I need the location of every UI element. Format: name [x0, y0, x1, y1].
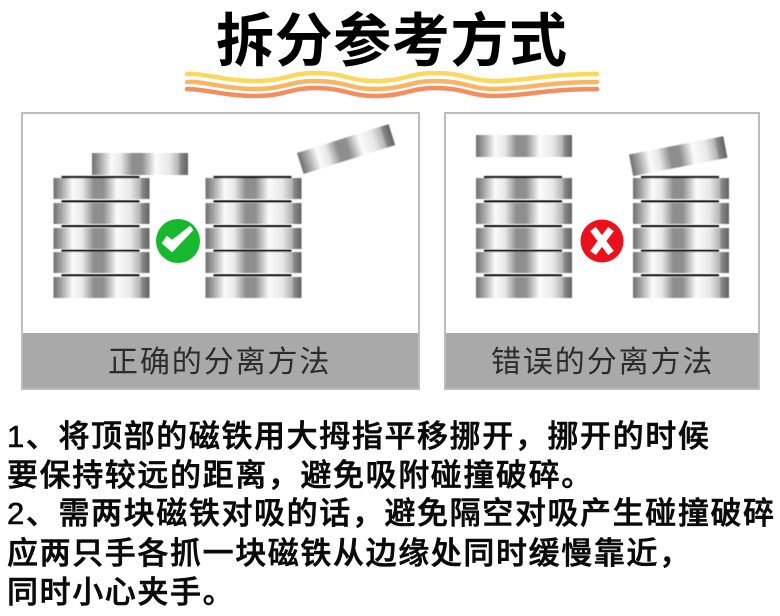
caption band: correct [23, 333, 418, 388]
magnet stack: correct right [206, 176, 302, 298]
magnet stack: wrong left [476, 176, 572, 298]
icon: red cross [580, 220, 624, 262]
magnet top: correct sliding [92, 153, 188, 175]
title: 拆分参考方式 [216, 9, 568, 74]
text block: instruction 2 line 2: 应两只手各抓一块磁铁从边缘处同时缓慢靠近， [7, 536, 692, 571]
magnets illustration [52, 124, 730, 299]
magnet top: wrong lifted [476, 135, 572, 157]
text block: instruction 2 line 3: 同时小心夹手。 [7, 575, 235, 610]
text block: instruction 2 line 1: 2、需两块磁铁对吸的话，避免隔空对吸产生碰撞破碎 [7, 496, 776, 531]
wavy underline [184, 70, 600, 98]
panel: wrong method [444, 112, 760, 390]
caption band: wrong [446, 333, 758, 388]
panel: correct method [21, 112, 420, 390]
magnet top: wrong tilted [629, 136, 727, 176]
magnet stack: correct left [54, 176, 150, 298]
icon: green check [156, 219, 200, 263]
text block: instruction 1 line 2: 要保持较远的距离，避免吸附碰撞破碎。 [7, 458, 594, 493]
magnet top: correct tilted away [297, 124, 395, 174]
caption: wrong method: 错误的分离方法 [491, 346, 714, 379]
text block: instruction 1 line 1: 1、将顶部的磁铁用大拇指平移挪开，挪开的时候 [7, 419, 710, 454]
caption: correct method: 正确的分离方法 [108, 346, 331, 379]
magnet stack: wrong right [633, 176, 729, 298]
